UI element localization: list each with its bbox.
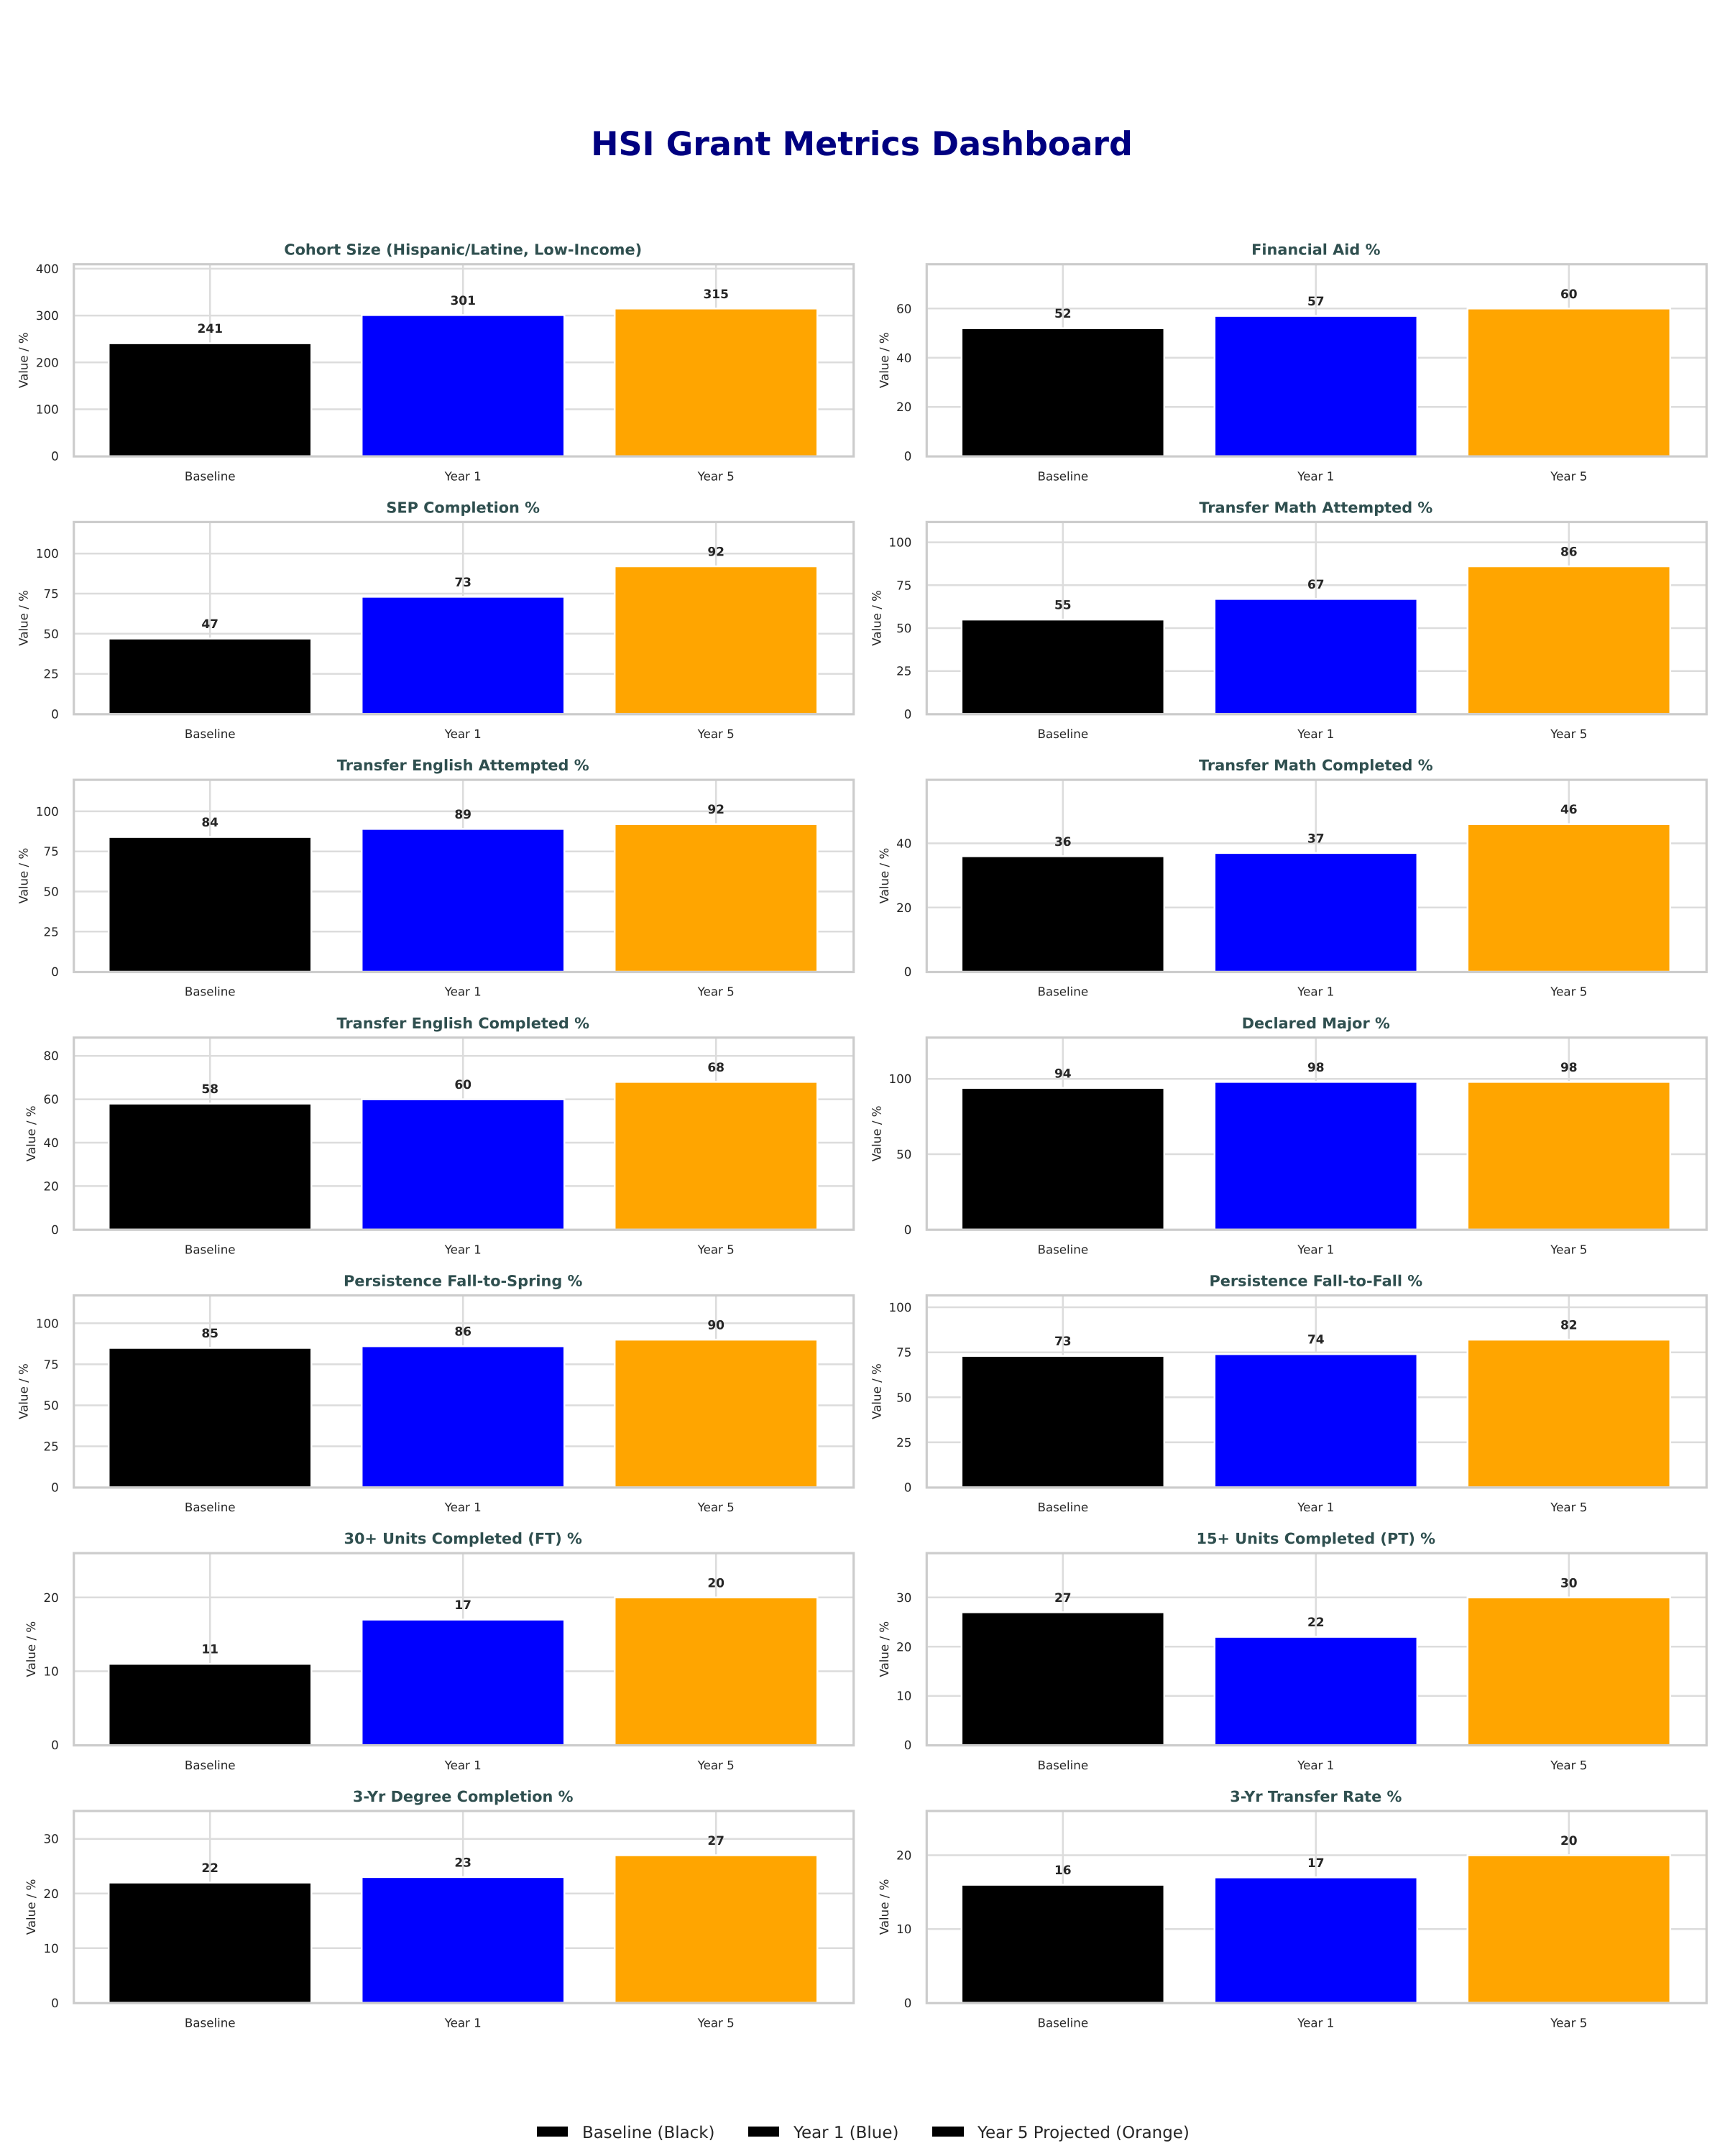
bar: Year 5 92	[615, 566, 817, 714]
y axis tick labels: 100	[889, 1301, 911, 1314]
value labels: 98	[1560, 1061, 1578, 1075]
x axis tick labels: Year 1	[444, 469, 482, 483]
y axis tick labels: 75	[43, 1358, 59, 1371]
bar: Year 1 73	[362, 596, 564, 714]
value labels: 20	[707, 1576, 724, 1590]
y axis tick labels: 30	[43, 1833, 59, 1846]
y axis tick labels: 20	[896, 1848, 911, 1862]
value labels: 73	[1054, 1335, 1072, 1349]
title: HSI Grant Metrics Dashboard	[591, 124, 1133, 163]
y axis tick labels: 100	[36, 403, 59, 417]
x axis tick labels: Year 1	[444, 1243, 482, 1256]
bar: Year 1 67	[1215, 599, 1417, 714]
value labels	[197, 287, 729, 336]
x axis tick labels: Baseline	[185, 1759, 236, 1772]
y axis tick labels: 40	[896, 837, 911, 850]
value labels	[1054, 1834, 1578, 1878]
x axis tick labels	[185, 1501, 735, 1514]
chart: Persistence Fall-to-Spring	[17, 1272, 854, 1514]
value labels	[1054, 1319, 1578, 1349]
bar: Year 1 301	[362, 315, 564, 456]
x axis tick labels: Year 1	[1297, 985, 1334, 999]
y axis tick labels: 25	[896, 1436, 911, 1450]
x axis tick labels: Year 5	[1550, 2016, 1587, 2030]
chart: Transfer Math Completed	[878, 757, 1706, 999]
y axis tick labels: 25	[43, 925, 59, 939]
chart title: Transfer English Attempted %	[337, 757, 589, 774]
x axis tick labels: Year 1	[1297, 1243, 1334, 1256]
y axis tick labels: 30	[896, 1591, 911, 1605]
value labels: 94	[1054, 1067, 1072, 1081]
bar: Baseline 84	[109, 837, 311, 972]
bar: Baseline 55	[962, 619, 1164, 714]
y axis label: Value / %	[878, 1879, 891, 1935]
value labels: 58	[201, 1082, 218, 1097]
x axis tick labels: Year 5	[1550, 985, 1587, 999]
y axis tick labels: 0	[904, 1223, 911, 1237]
x axis tick labels: Baseline	[1037, 1501, 1088, 1514]
bar: Year 1 37	[1215, 853, 1417, 972]
legend item: Year 1	[748, 2124, 898, 2142]
bar: Baseline 52	[962, 328, 1164, 456]
chart: Persistence Fall-to-Fall	[870, 1272, 1706, 1514]
x axis tick labels: Year 1	[1297, 727, 1334, 741]
value labels: 74	[1307, 1333, 1325, 1348]
value labels	[1054, 803, 1578, 849]
bar: Year 5 315	[615, 308, 817, 456]
x axis tick labels	[185, 1759, 735, 1772]
bar: Year 5 82	[1468, 1340, 1670, 1488]
y axis tick labels: 0	[51, 450, 59, 464]
chart title: Declared Major %	[1242, 1015, 1390, 1032]
x axis tick labels	[1037, 1501, 1587, 1514]
bar: Year 1 22	[1215, 1637, 1417, 1745]
y axis tick labels: 50	[43, 1399, 59, 1413]
value labels: 17	[454, 1598, 472, 1613]
y axis label: Value / %	[878, 332, 891, 388]
value labels: 37	[1307, 831, 1325, 846]
y axis tick labels: 20	[43, 1591, 59, 1605]
bar: Year 1 89	[362, 829, 564, 972]
bar: Year 1 17	[1215, 1877, 1417, 2003]
y axis tick labels: 10	[896, 1690, 911, 1703]
value labels: 16	[1054, 1864, 1072, 1878]
y axis label: Value / %	[24, 1105, 38, 1161]
value labels: 92	[707, 545, 724, 560]
bar: Year 5 30	[1468, 1598, 1670, 1745]
y axis tick labels: 0	[51, 1738, 59, 1752]
x axis tick labels: Year 1	[444, 1759, 482, 1772]
value labels	[201, 1834, 724, 1876]
y axis label: Value / %	[17, 848, 31, 903]
y axis tick labels: 0	[904, 965, 911, 979]
chart: Transfer English Attempted	[17, 757, 854, 999]
value labels: 98	[1307, 1061, 1325, 1075]
y axis tick labels	[889, 1301, 911, 1495]
chart: Declared Major	[870, 1015, 1706, 1256]
bar: Year 5 68	[615, 1082, 817, 1230]
y axis tick labels: 100	[889, 1072, 911, 1086]
y axis label: Value / %	[870, 590, 883, 646]
chart: 30+ Units Completed (FT)	[24, 1530, 854, 1772]
y axis tick labels	[896, 1591, 911, 1752]
y axis label: Value / %	[17, 1363, 31, 1419]
y axis tick labels: 0	[904, 1480, 911, 1495]
bar: Year 5 90	[615, 1340, 817, 1488]
x axis tick labels	[185, 727, 735, 741]
x axis tick labels	[1037, 1759, 1587, 1772]
x axis tick labels: Year 5	[1550, 1243, 1587, 1256]
legend item: Baseline: Baseline (Black)	[582, 2124, 714, 2142]
x axis tick labels: Baseline	[1037, 985, 1088, 999]
value labels	[201, 1061, 724, 1097]
value labels: 89	[454, 808, 472, 822]
x axis tick labels: Year 1	[444, 2016, 482, 2030]
y axis label: Value / %	[24, 1879, 38, 1935]
y axis tick labels: 200	[36, 356, 59, 369]
value labels	[201, 803, 724, 830]
chart: 3-Yr Transfer Rate	[878, 1788, 1706, 2030]
chart title: Financial Aid %	[1251, 241, 1381, 259]
x axis tick labels: Baseline	[185, 1243, 236, 1256]
x axis tick labels: Year 1	[1297, 2016, 1334, 2030]
x axis tick labels: Baseline	[185, 469, 236, 483]
chart: Transfer English Completed	[24, 1015, 854, 1256]
value labels: 60	[1560, 287, 1578, 302]
x axis tick labels: Year 5	[697, 2016, 735, 2030]
chart: 15+ Units Completed (PT)	[878, 1530, 1706, 1772]
chart title: Persistence Fall-to-Spring %	[344, 1272, 582, 1289]
y axis tick labels: 0	[51, 1480, 59, 1495]
y axis tick labels: 50	[896, 1148, 911, 1161]
x axis tick labels: Baseline	[185, 727, 236, 741]
y axis tick labels: 0	[904, 450, 911, 464]
x axis tick labels	[185, 469, 735, 483]
x axis tick labels: Baseline	[1037, 469, 1088, 483]
value labels: 55	[1054, 599, 1072, 613]
value labels	[1054, 1576, 1578, 1630]
value labels: 60	[454, 1078, 472, 1092]
y axis tick labels: 60	[43, 1093, 59, 1107]
y axis tick labels: 50	[896, 1391, 911, 1404]
value labels: 84	[201, 816, 218, 830]
value labels: 52	[1054, 307, 1072, 321]
value labels: 86	[454, 1325, 472, 1340]
bar: Baseline 94	[962, 1088, 1164, 1230]
bar: Baseline 11	[109, 1664, 311, 1745]
chart title: Transfer English Completed %	[336, 1015, 589, 1032]
y axis label: Value / %	[878, 848, 891, 903]
y axis tick labels	[889, 536, 911, 721]
value labels: 23	[454, 1856, 472, 1870]
x axis tick labels: Baseline	[1037, 727, 1088, 741]
bar: Baseline 58	[109, 1104, 311, 1230]
y axis tick labels: 10	[896, 1922, 911, 1936]
x axis tick labels	[1037, 1243, 1587, 1256]
y axis tick labels: 75	[896, 1346, 911, 1360]
y axis tick labels: 20	[896, 1640, 911, 1654]
value labels: 57	[1307, 295, 1325, 309]
value labels: 85	[201, 1327, 218, 1341]
bar: Baseline 85	[109, 1348, 311, 1488]
bar: Year 5 92	[615, 824, 817, 972]
x axis tick labels: Year 1	[1297, 469, 1334, 483]
value labels: 36	[1054, 835, 1072, 849]
bar: Baseline 22	[109, 1883, 311, 2003]
y axis tick labels: 50	[43, 627, 59, 641]
y axis tick labels	[43, 1833, 59, 2010]
bar: Year 5 46	[1468, 824, 1670, 972]
legend	[537, 2124, 1190, 2142]
y axis tick labels: 10	[43, 1942, 59, 1955]
bar: Year 5 20	[615, 1598, 817, 1745]
y axis tick labels	[36, 1317, 59, 1495]
y axis tick labels: 25	[43, 1440, 59, 1453]
x axis tick labels: Year 1	[1297, 1501, 1334, 1514]
bar: Year 1 86	[362, 1346, 564, 1488]
bar: Baseline 73	[962, 1356, 1164, 1488]
value labels: 22	[1307, 1616, 1325, 1630]
y axis tick labels: 100	[36, 805, 59, 819]
chart title: 3-Yr Degree Completion %	[353, 1788, 574, 1805]
y axis tick labels: 300	[36, 309, 59, 323]
x axis tick labels: Year 5	[697, 985, 735, 999]
y axis tick labels	[43, 1049, 59, 1237]
y axis tick labels: 40	[43, 1136, 59, 1150]
value labels: 301	[450, 294, 476, 308]
bar: Baseline 27	[962, 1612, 1164, 1745]
y axis tick labels: 50	[43, 885, 59, 898]
chart: Financial Aid	[878, 241, 1706, 483]
bar: Year 5 60	[1468, 308, 1670, 456]
y axis label: Value / %	[17, 590, 31, 646]
value labels: 22	[201, 1861, 218, 1876]
y axis tick labels: 20	[43, 1179, 59, 1193]
chart: Transfer Math Attempted	[870, 499, 1706, 741]
y axis tick labels: 50	[896, 622, 911, 635]
x axis tick labels: Baseline	[1037, 1759, 1088, 1772]
value labels: 82	[1560, 1319, 1578, 1333]
y axis tick labels: 75	[43, 845, 59, 859]
y axis tick labels: 100	[36, 547, 59, 561]
bar: Baseline 36	[962, 856, 1164, 972]
x axis tick labels: Year 5	[697, 469, 735, 483]
y axis tick labels: 25	[43, 668, 59, 681]
chart title: 3-Yr Transfer Rate %	[1230, 1788, 1402, 1805]
x axis tick labels	[1037, 985, 1587, 999]
legend item: Year 5 Projected: Year 5 Projected (Orange)	[977, 2124, 1190, 2142]
y axis tick labels: 0	[51, 1223, 59, 1237]
bar: Year 1 60	[362, 1100, 564, 1230]
x axis tick labels: Year 1	[1297, 1759, 1334, 1772]
y axis tick labels	[36, 805, 59, 979]
x axis tick labels: Year 5	[697, 1243, 735, 1256]
chart title: Persistence Fall-to-Fall %	[1210, 1272, 1422, 1289]
y axis tick labels	[43, 1591, 59, 1752]
x axis tick labels: Baseline	[185, 2016, 236, 2030]
bar: Baseline 47	[109, 638, 311, 714]
y axis tick labels: 100	[36, 1317, 59, 1330]
x axis tick labels: Year 5	[697, 1759, 735, 1772]
value labels	[1054, 545, 1578, 613]
chart title: Cohort Size (Hispanic/Latine, Low-Income)	[284, 241, 642, 259]
chart: 3-Yr Degree Completion	[24, 1788, 854, 2030]
bar: Year 1 17	[362, 1620, 564, 1745]
value labels	[201, 545, 724, 632]
y axis tick labels: 0	[51, 707, 59, 721]
y axis tick labels: 75	[43, 587, 59, 601]
y axis tick labels: 20	[896, 901, 911, 915]
bar: Year 1 74	[1215, 1354, 1417, 1488]
value labels: 241	[197, 322, 223, 336]
y axis tick labels: 10	[43, 1664, 59, 1678]
y axis label: Value / %	[870, 1105, 883, 1161]
legend item: Year 1: Year 1 (Blue)	[793, 2124, 898, 2142]
x axis tick labels: Year 1	[444, 985, 482, 999]
value labels: 67	[1307, 578, 1325, 592]
y axis tick labels: 80	[43, 1049, 59, 1063]
bar: Year 1 57	[1215, 316, 1417, 456]
y axis label: Value / %	[878, 1621, 891, 1677]
bar: Year 5 27	[615, 1856, 817, 2003]
x axis tick labels	[1037, 727, 1587, 741]
value labels: 30	[1560, 1576, 1578, 1590]
x axis tick labels	[1037, 469, 1587, 483]
y axis tick labels	[889, 1072, 911, 1237]
y axis label: Value / %	[17, 332, 31, 388]
y axis tick labels: 20	[43, 1887, 59, 1901]
x axis tick labels: Year 5	[1550, 727, 1587, 741]
value labels: 20	[1560, 1834, 1578, 1848]
y axis tick labels: 0	[51, 965, 59, 979]
y axis tick labels: 25	[896, 665, 911, 678]
bar: Year 5 20	[1468, 1856, 1670, 2003]
chart title: Transfer Math Attempted %	[1199, 499, 1432, 516]
value labels: 11	[201, 1643, 218, 1657]
x axis tick labels	[185, 1243, 735, 1256]
y axis tick labels: 0	[51, 1996, 59, 2010]
y axis tick labels: 60	[896, 302, 911, 315]
value labels: 86	[1560, 545, 1578, 560]
x axis tick labels: Baseline	[1037, 2016, 1088, 2030]
y axis tick labels: 400	[36, 262, 59, 276]
y axis tick labels: 0	[904, 707, 911, 721]
y axis tick labels: 0	[904, 1996, 911, 2010]
x axis tick labels	[1037, 2017, 1587, 2030]
y axis tick labels: 40	[896, 351, 911, 365]
x axis tick labels: Year 5	[1550, 1759, 1587, 1772]
value labels: 47	[201, 617, 218, 632]
value labels: 73	[454, 576, 472, 590]
x axis tick labels	[185, 985, 735, 999]
y axis label: Value / %	[24, 1621, 38, 1677]
y axis tick labels: 0	[904, 1738, 911, 1752]
chart: Cohort Size	[17, 241, 854, 483]
y axis tick labels: 75	[896, 579, 911, 592]
chart title: Transfer Math Completed %	[1199, 757, 1433, 774]
x axis tick labels: Year 1	[444, 1501, 482, 1514]
y axis label: Value / %	[870, 1363, 883, 1419]
value labels	[1054, 1061, 1578, 1081]
value labels: 17	[1307, 1856, 1325, 1871]
x axis tick labels: Baseline	[185, 985, 236, 999]
chart title: SEP Completion %	[386, 499, 540, 516]
bar: Baseline 241	[109, 344, 311, 456]
value labels: 92	[707, 803, 724, 817]
value labels: 68	[707, 1061, 724, 1075]
bar: Baseline 16	[962, 1885, 1164, 2003]
x axis tick labels: Baseline	[1037, 1243, 1088, 1256]
bar: Year 5 98	[1468, 1082, 1670, 1230]
value labels	[201, 1319, 724, 1341]
y axis tick labels	[36, 262, 59, 464]
value labels	[1054, 287, 1578, 321]
y axis tick labels: 20	[896, 400, 911, 414]
chart title: 15+ Units Completed (PT) %	[1197, 1530, 1435, 1547]
bar: Year 1 98	[1215, 1082, 1417, 1230]
y axis tick labels	[896, 302, 911, 464]
y axis tick labels: 100	[889, 536, 911, 550]
x axis tick labels: Year 5	[1550, 1501, 1587, 1514]
value labels: 27	[707, 1834, 724, 1848]
bar: Year 5 86	[1468, 566, 1670, 714]
value labels: 46	[1560, 803, 1578, 817]
x axis tick labels	[185, 2017, 735, 2030]
x axis tick labels: Year 5	[1550, 469, 1587, 483]
y axis tick labels	[36, 547, 59, 721]
chart title: 30+ Units Completed (FT) %	[344, 1530, 582, 1547]
bar: Year 1 23	[362, 1877, 564, 2003]
x axis tick labels: Baseline	[185, 1501, 236, 1514]
y axis tick labels	[896, 837, 911, 979]
value labels	[201, 1576, 724, 1657]
x axis tick labels: Year 5	[697, 1501, 735, 1514]
value labels: 27	[1054, 1591, 1072, 1606]
y axis tick labels	[896, 1848, 911, 2010]
chart: SEP Completion	[17, 499, 854, 741]
value labels: 90	[707, 1319, 724, 1333]
x axis tick labels: Year 1	[444, 727, 482, 741]
value labels: 315	[703, 287, 729, 302]
x axis tick labels: Year 5	[697, 727, 735, 741]
